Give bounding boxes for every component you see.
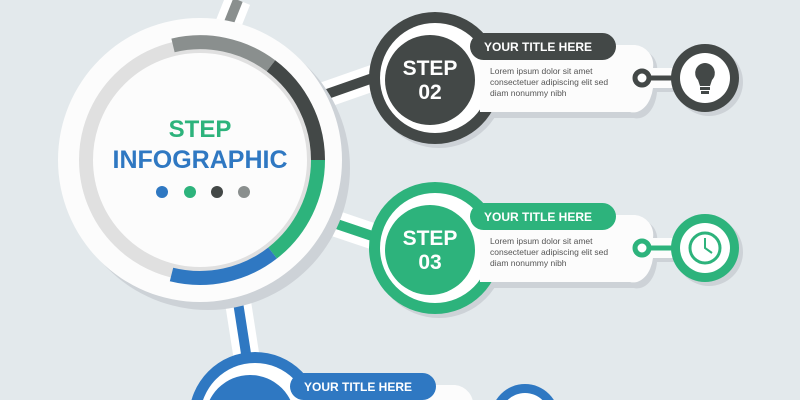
step 02: diam nonummy nibh <box>490 88 567 98</box>
step 02: consectetuer adipiscing elit sed <box>490 77 608 87</box>
step 04 <box>189 352 559 400</box>
step 02: YOUR TITLE HERE <box>484 40 592 54</box>
step 03 <box>369 182 743 318</box>
main circle <box>58 18 350 310</box>
step 03: YOUR TITLE HERE <box>484 210 592 224</box>
connectors <box>222 0 390 360</box>
step 02: STEP <box>403 57 457 80</box>
step 03: Lorem ipsum dolor sit amet <box>490 236 593 246</box>
icon: clock <box>690 233 720 263</box>
title <box>112 116 288 174</box>
step 03: diam nonummy nibh <box>490 258 567 268</box>
title: STEP <box>169 116 231 143</box>
step 03: 03 <box>418 251 442 274</box>
step 03: STEP <box>403 227 457 250</box>
step 03: consectetuer adipiscing elit sed <box>490 247 608 257</box>
step 04: YOUR TITLE HERE <box>304 380 412 394</box>
step 02: 02 <box>418 81 442 104</box>
icon: bulb <box>695 63 715 94</box>
title: INFOGRAPHIC <box>112 146 288 174</box>
step 02 <box>369 12 743 148</box>
dots <box>156 186 250 198</box>
step 02: Lorem ipsum dolor sit amet <box>490 66 593 76</box>
